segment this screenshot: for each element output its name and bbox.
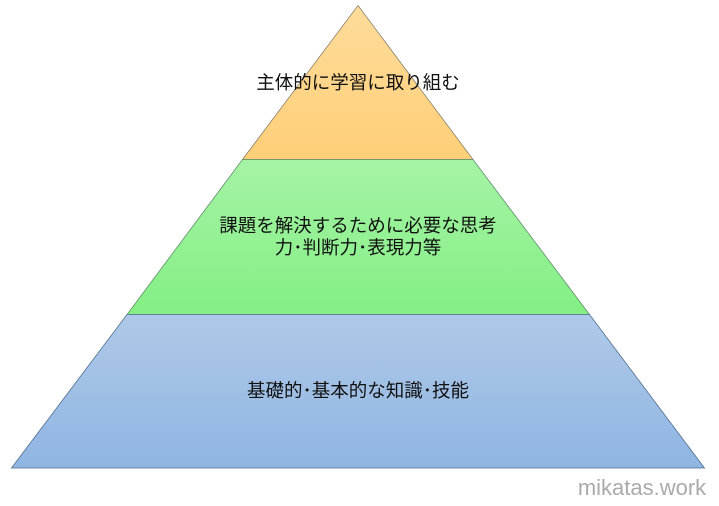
label: middle tier: 力･判断力･表現力等 bbox=[275, 237, 441, 258]
panel: middle tier bbox=[127, 160, 590, 314]
label: top tier: 主体的に学習に取り組む bbox=[256, 72, 460, 93]
label: middle tier: 課題を解決するために必要な思考 bbox=[219, 215, 497, 236]
panel: top tier bbox=[242, 6, 473, 160]
label: bottom tier: 基礎的･基本的な知識･技能 bbox=[247, 380, 469, 401]
watermark: mikatas.work bbox=[578, 475, 707, 500]
panel: bottom tier bbox=[12, 314, 704, 468]
